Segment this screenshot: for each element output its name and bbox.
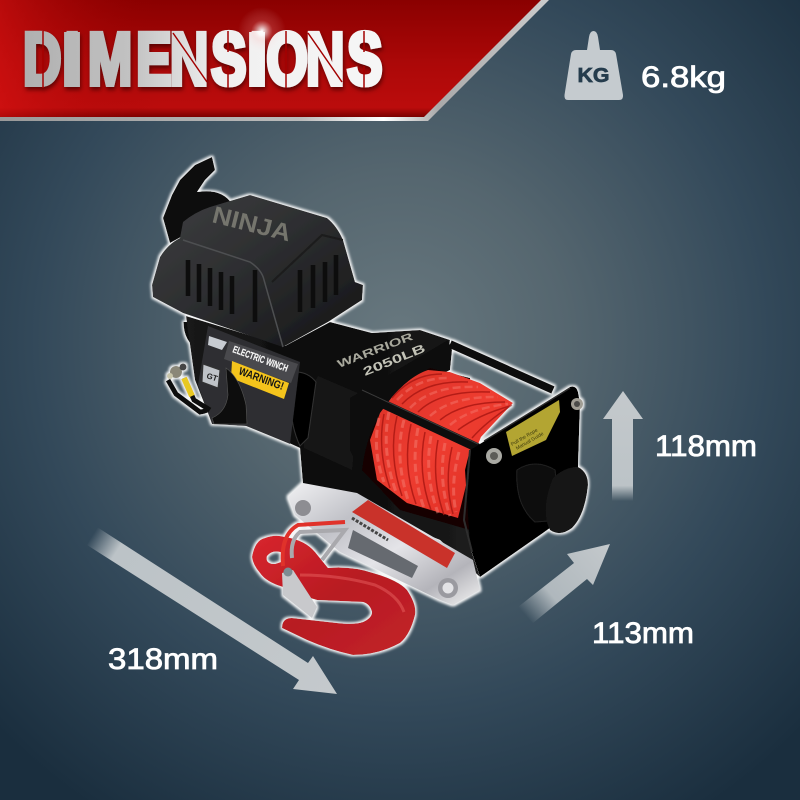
arrow: width [518, 544, 610, 623]
bolts [486, 398, 583, 464]
banner: red title ribbon [0, 0, 549, 121]
label: warning: WARNING! [237, 366, 285, 393]
motor housing [186, 316, 480, 577]
title: DIMENSIONS [23, 18, 383, 101]
lens flare [238, 7, 286, 55]
label: electric winch [224, 341, 298, 383]
hook [252, 522, 415, 655]
motor embossed text: 2050LB [361, 341, 428, 379]
label: silver motor wrap [198, 326, 300, 444]
cover embossed name: NINJA [210, 202, 294, 247]
label: height: 118mm [655, 430, 757, 463]
icon: weight: KG [578, 65, 610, 87]
solenoid cable [168, 322, 222, 412]
right end plate [465, 387, 580, 577]
plug boot [163, 157, 232, 243]
terminal wire [167, 364, 210, 410]
label: small logo patches [202, 336, 227, 388]
label: width: 113mm [592, 617, 694, 650]
motor highlight band [304, 376, 360, 470]
handle [212, 368, 247, 424]
label: length: 318mm [108, 643, 218, 676]
motor embossed text: WARRIOR [336, 331, 415, 371]
cover vents [188, 255, 336, 322]
red rope drum [370, 370, 513, 518]
gearbox hub [517, 464, 588, 533]
winch photo illustration [152, 157, 588, 655]
arrow: length [87, 527, 337, 694]
front tie bar [362, 394, 478, 448]
warning sticker: Pull the Rope [510, 427, 539, 448]
label: warning [231, 361, 289, 399]
weight value: 6.8kg [641, 61, 726, 94]
rear tie bar [450, 344, 553, 390]
rope spool dark interior [362, 368, 470, 530]
icon: weight [564, 31, 623, 100]
motor embossed text [336, 331, 428, 379]
winch cover [152, 195, 363, 347]
label: small logo patches: GT [205, 371, 219, 383]
arrow: height [603, 391, 643, 501]
fairlead [288, 483, 480, 605]
left end plate [350, 340, 452, 490]
label: electric winch: ELECTRIC WINCH [231, 344, 289, 375]
motor end ring [291, 372, 316, 446]
warning sticker [506, 400, 560, 456]
warning sticker: Manual Guide [515, 431, 545, 452]
